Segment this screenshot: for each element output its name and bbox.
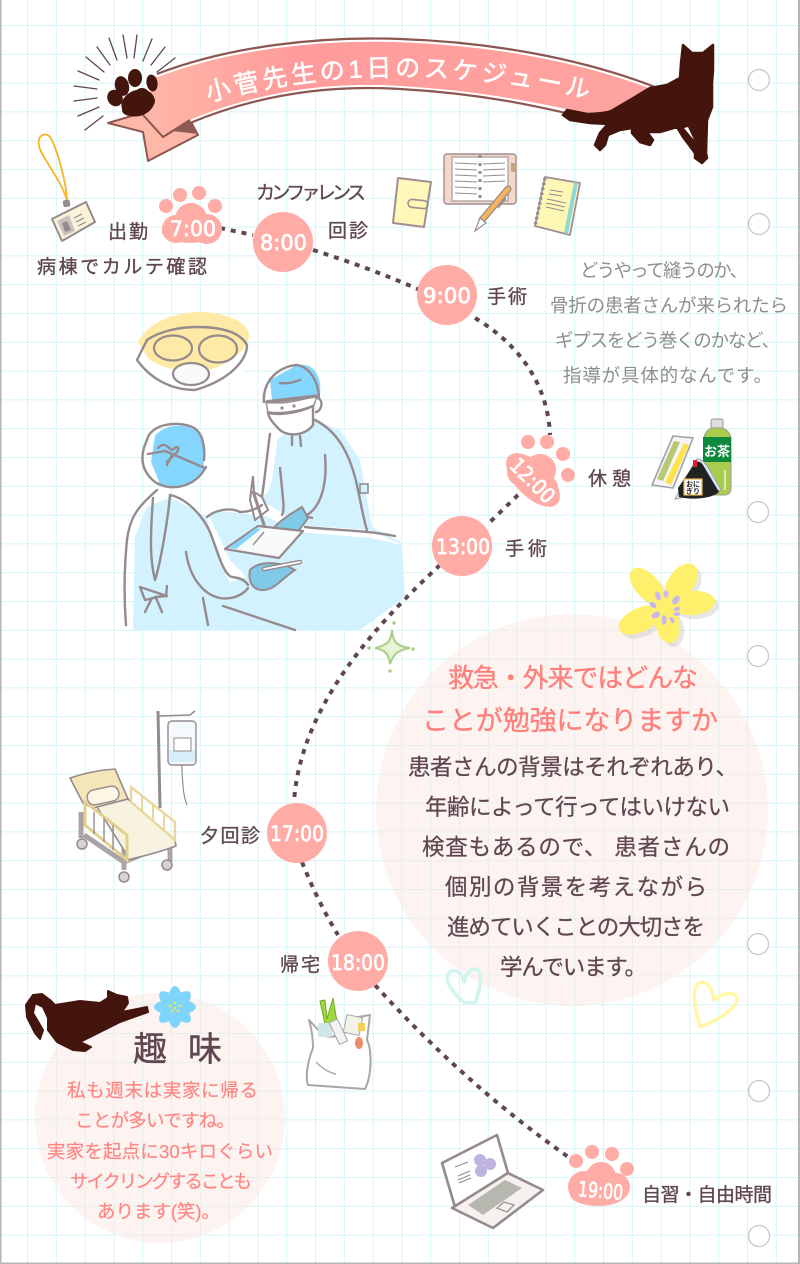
paw marker 12:00: [497, 435, 575, 516]
panel body: 学んでいます。: [500, 955, 647, 980]
label: surgery morning: 手術: [487, 286, 527, 308]
label: self study and free time: 自習・自由時間: [642, 1184, 772, 1206]
hobby body: あります(笑)。: [97, 1201, 220, 1222]
right surgeon: [258, 365, 395, 540]
time marker 9:00: [417, 265, 477, 325]
hobby body: 私も週末は実家に帰る: [67, 1080, 258, 1101]
time marker 17:00: 17:00: [270, 822, 324, 846]
paw marker 7:00: [159, 186, 222, 244]
icon: hospital bed and IV drip: [70, 711, 196, 882]
panel heading: ことが勉強になりますか: [422, 706, 718, 736]
icon: blue flower: [154, 986, 196, 1028]
icon: black paw with rays: [74, 35, 175, 130]
panel body: 個別の背景を考えながら: [445, 875, 707, 900]
icon: yellow heart: [694, 982, 737, 1027]
icon: planners and pen: [393, 154, 580, 235]
ribbon tail: [108, 112, 198, 161]
spiral notebook: [535, 177, 580, 235]
hobby heading: 趣味: [133, 1031, 222, 1069]
icon: ID badge on lanyard: [39, 134, 95, 241]
white highlight: [205, 436, 402, 582]
panel body: [408, 755, 738, 980]
label: break: 休憩: [588, 468, 631, 490]
icon: yellow flower: [614, 558, 720, 649]
panel heading: [422, 663, 718, 736]
icon: teal heart: [447, 969, 481, 1003]
panel: emergency outpatient backdrop: [376, 614, 768, 1006]
icon: green sparkle: [367, 621, 415, 673]
time marker 18:00: 18:00: [331, 951, 385, 975]
time marker 8:00: [253, 212, 313, 272]
icon: laptop: [442, 1135, 543, 1228]
panel heading: 救急・外来ではどんな: [448, 663, 698, 693]
bed frame: [77, 812, 172, 882]
panel body: 進めていくことの大切さを: [447, 915, 705, 940]
time marker 13:00: 13:00: [436, 535, 490, 559]
panel text: emergency outpatient learning: [408, 663, 738, 980]
rice ball: ぎり: [686, 486, 700, 496]
label: conference: カンファレンス: [256, 183, 366, 204]
rice ball: [675, 459, 721, 499]
text block: how they teach: [550, 260, 788, 386]
text block: how they teach: 指導が具体的なんです。: [563, 365, 772, 386]
green tea bottle: お茶: [704, 444, 730, 459]
hobby body: 実家を起点に30キロぐらい: [47, 1141, 273, 1162]
schedule route dotted line: [220, 228, 580, 1165]
side rail near: [85, 802, 127, 860]
paw marker 19:00: [568, 1145, 634, 1206]
label: surgery afternoon: 手術: [505, 538, 547, 560]
banner title text: 小菅先生の1日のスケジュール: [208, 57, 589, 102]
icon: lunch snacks and tea: [652, 419, 731, 499]
open planner: [444, 154, 516, 204]
schedule labels: [37, 183, 772, 1206]
label: go home: 帰宅: [280, 954, 320, 976]
IV stand: [158, 711, 196, 808]
panel body: 年齢によって行ってはいけない: [425, 795, 730, 820]
mattress: [97, 799, 176, 860]
time marker 8:00: 8:00: [260, 231, 307, 255]
icon: black cat stretching: [26, 991, 148, 1051]
panel: hobby backdrop: [35, 993, 285, 1243]
panel text: hobby: [47, 1031, 273, 1222]
closed planner: [393, 178, 431, 227]
time marker 18:00: [328, 931, 388, 991]
paw marker 12:00: 12:00: [505, 453, 560, 508]
ribbon band: [143, 40, 660, 137]
text block: how they teach: ギプスをどう巻くのかなど、: [555, 330, 780, 351]
operating lamp: [137, 312, 249, 390]
panel body: 検査もあるので、 患者さんの: [422, 835, 730, 860]
time marker 13:00: [432, 516, 492, 576]
text block: how they teach: 骨折の患者さんが来られたら: [550, 295, 788, 316]
panel body: 患者さんの背景はそれぞれあり、: [408, 755, 738, 780]
text block: how they teach: どうやって縫うのか、: [580, 260, 748, 281]
paw marker 19:00: 19:00: [577, 1177, 624, 1205]
title banner: [107, 37, 656, 162]
time marker 9:00: 9:00: [423, 284, 471, 308]
left surgeon: [125, 424, 300, 630]
rice ball: おに: [686, 480, 700, 488]
hobby body: サイクリングすることも: [70, 1171, 252, 1192]
label: arrive: 出勤: [108, 221, 148, 243]
clipboard with hand writing: [225, 476, 303, 558]
paw marker 7:00: 7:00: [170, 217, 216, 241]
icon: black cat on banner: [563, 45, 713, 163]
pen: [475, 189, 508, 231]
label: rounds: 回診: [328, 220, 368, 242]
gown and table fill: [133, 420, 405, 630]
sandwich: [652, 436, 693, 488]
binder holes: [748, 70, 770, 1246]
label: ward chart check: 病棟でカルテ確認: [37, 256, 207, 278]
icon: shopping bag: [307, 998, 371, 1089]
side rail far: [131, 787, 175, 840]
hobby body: [47, 1080, 273, 1222]
label: evening rounds: 夕回診: [200, 825, 260, 847]
hobby body: ことが多いですね。: [75, 1110, 235, 1131]
time marker 17:00: [267, 803, 327, 863]
illustration: surgeons in operating room: [125, 312, 405, 630]
headboard and pillow: [70, 769, 128, 808]
